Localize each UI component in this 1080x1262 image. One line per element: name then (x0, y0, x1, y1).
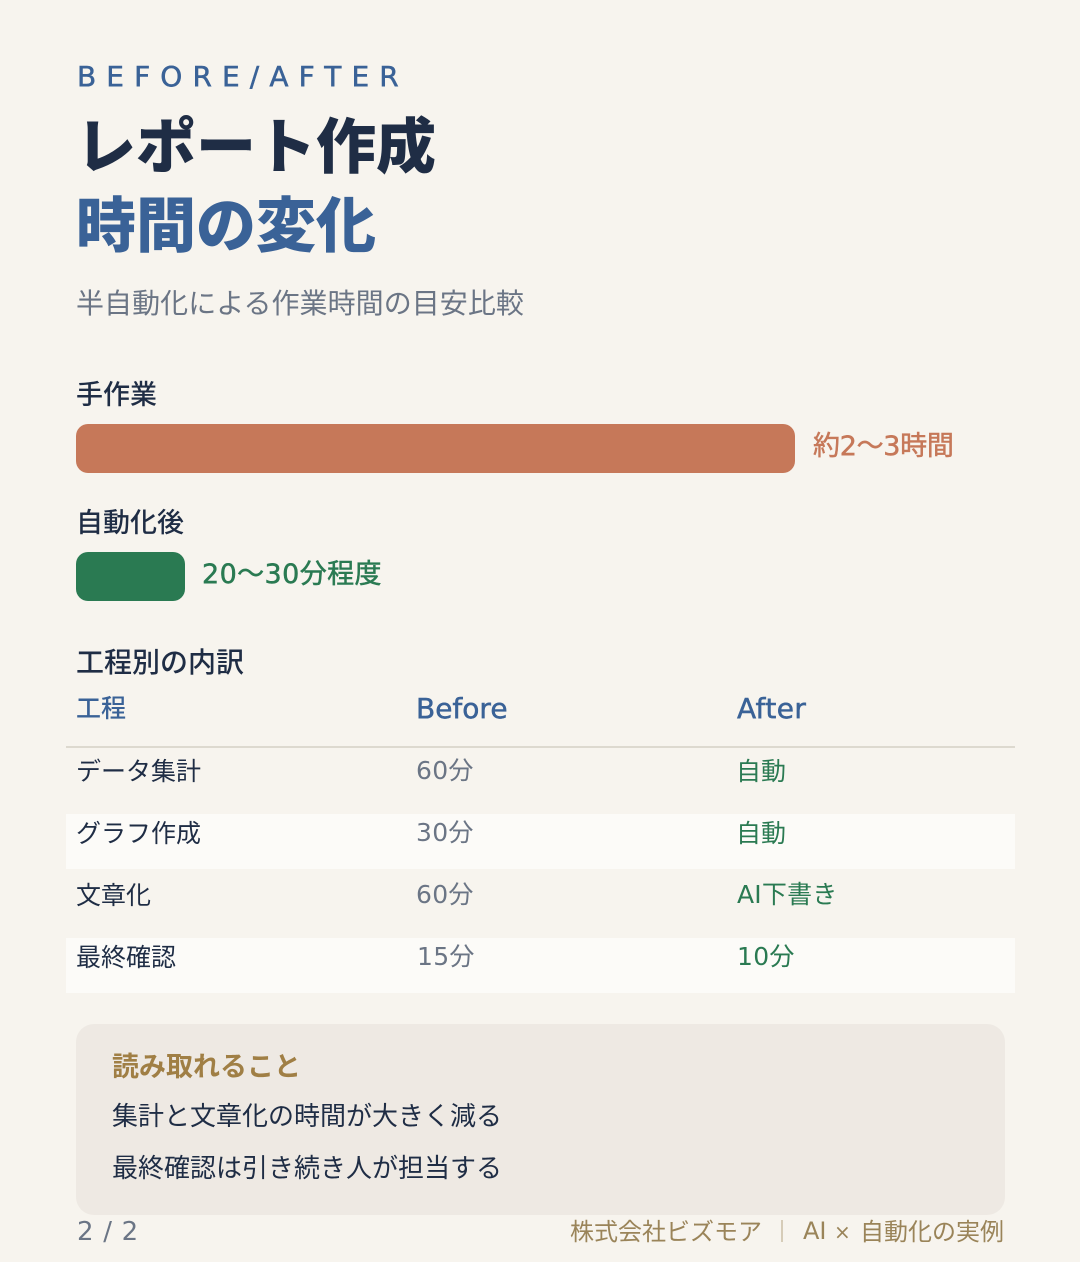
row: graph (66, 814, 1015, 869)
row: final check (66, 938, 1015, 993)
bar: automated (76, 552, 185, 601)
takeaway 1: 集計と文章化の時間が大きく減る (112, 1096, 502, 1133)
label: automated: 自動化後 (76, 501, 184, 540)
footer credit (570, 1212, 1004, 1247)
panel: takeaways (76, 1024, 1005, 1215)
row: text: 60分 (416, 880, 474, 909)
row: final check: 10分 (737, 942, 795, 971)
title (76, 99, 436, 265)
page number: 2 / 2 (77, 1217, 139, 1247)
title: 時間の変化 (76, 178, 376, 265)
takeaway 2: 最終確認は引き続き人が担当する (112, 1148, 502, 1185)
table header: Before (416, 692, 508, 725)
row: text (76, 876, 837, 912)
row: graph: グラフ作成 (76, 814, 201, 850)
row: text: AI下書き (737, 880, 837, 909)
bar: manual (76, 424, 795, 473)
row: data: データ集計 (76, 752, 201, 788)
footer credit: 株式会社ビズモア (570, 1212, 762, 1247)
row: graph: 30分 (416, 818, 474, 847)
value: manual: 約2〜3時間 (813, 431, 954, 462)
row: data: 自動 (736, 752, 786, 788)
eyebrow: BEFORE/AFTER (77, 60, 409, 93)
value: automated: 20〜30分程度 (202, 559, 382, 590)
panel heading: 読み取れること (112, 1045, 301, 1084)
row: graph: 自動 (736, 814, 786, 850)
row: data (76, 752, 786, 788)
footer credit: 自動化の実例 (860, 1212, 1004, 1247)
row: final check: 15分 (417, 942, 475, 971)
table (66, 689, 1015, 993)
footer credit: AI (803, 1217, 826, 1245)
title: レポート作成 (76, 99, 436, 186)
row: text: 文章化 (76, 876, 151, 912)
table header (66, 690, 1015, 748)
table header: After (737, 692, 806, 725)
heading: breakdown: 工程別の内訳 (76, 641, 244, 681)
row: data: 60分 (416, 756, 474, 785)
footer credit: × (834, 1220, 851, 1244)
table header: 工程 (76, 689, 126, 725)
subtitle: 半自動化による作業時間の目安比較 (76, 282, 524, 322)
row: final check: 最終確認 (76, 938, 176, 974)
label: manual: 手作業 (76, 373, 157, 412)
